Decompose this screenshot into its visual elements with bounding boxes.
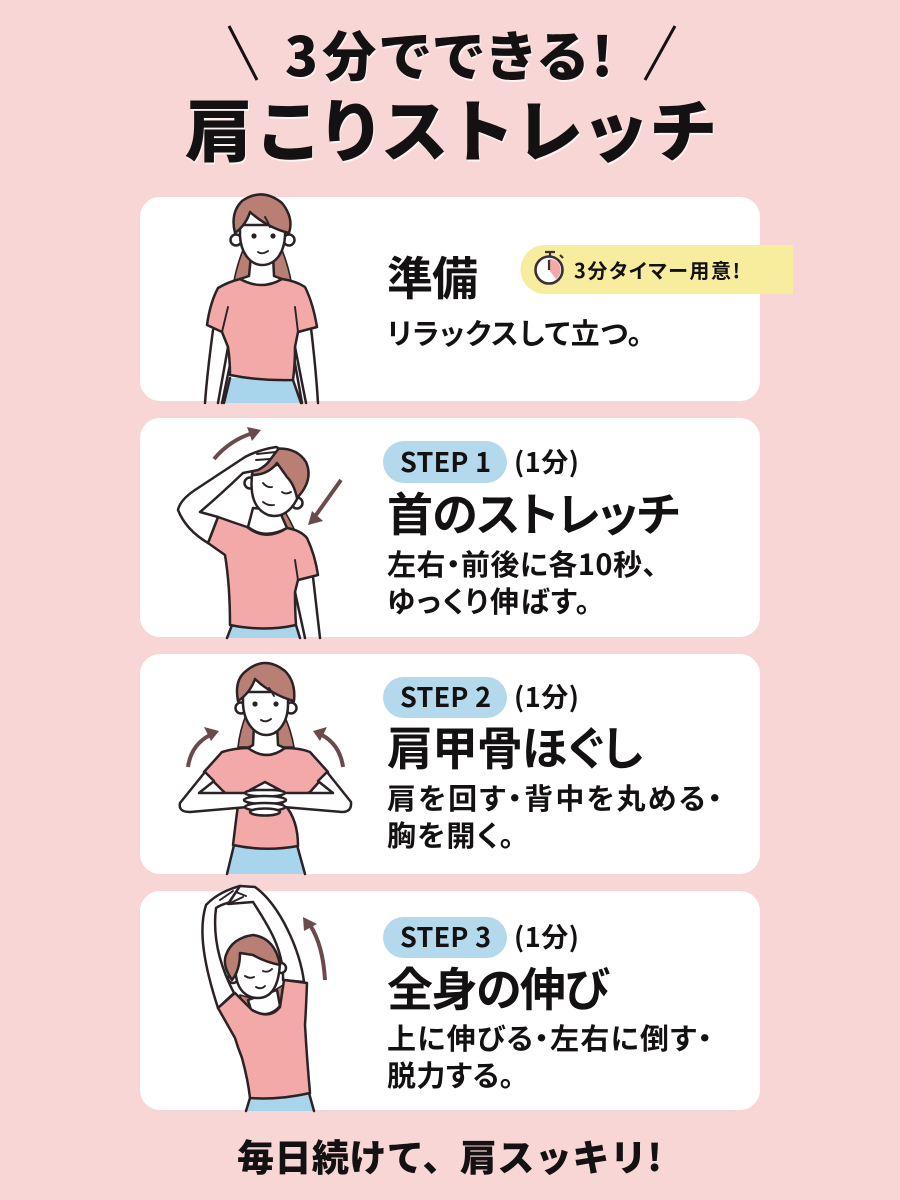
callout: timer: 3分タイマー用意! [574, 255, 740, 284]
description [387, 542, 657, 621]
panel: STEP 2 [140, 654, 760, 874]
STEP 2 badge: STEP 2 [400, 676, 491, 715]
arrow: left [188, 727, 219, 767]
STEP 3 badge: (1分) [514, 916, 579, 955]
description: 左右・前後に各10秒、 [387, 542, 657, 584]
STEP 2 badge: (1分) [514, 676, 579, 715]
figure: shoulder blades [180, 663, 351, 874]
heading: 首のストレッチ [387, 479, 680, 545]
panel: STEP 3 [140, 886, 760, 1111]
description: 脱力する。 [387, 1053, 514, 1095]
footer message: 毎日続けて、肩スッキリ! [237, 1128, 662, 1182]
callout: timer [520, 245, 793, 294]
description: 胸を開く。 [387, 813, 514, 855]
panel: STEP 1 [140, 418, 760, 638]
figure: standing woman [205, 194, 318, 403]
description: リラックスして立つ。 [387, 311, 642, 353]
description [387, 776, 722, 855]
arrow: lower [308, 480, 341, 525]
STEP 2 badge [383, 676, 579, 718]
main heading: 肩こりストレッチ [185, 77, 715, 176]
STEP 1 badge [383, 441, 579, 483]
heading: 全身の伸び [387, 954, 611, 1020]
STEP 3 badge: STEP 3 [400, 916, 491, 955]
arrow: upper [214, 427, 261, 459]
description: ゆっくり伸ばす。 [387, 579, 590, 621]
figure: full body stretch [202, 886, 314, 1111]
panel: 準備 [140, 194, 793, 403]
description [387, 1016, 712, 1095]
STEP 3 badge [383, 916, 579, 958]
STEP 1 badge: (1分) [514, 441, 579, 480]
icon: stopwatch [536, 252, 563, 284]
figure: neck stretch [178, 447, 320, 638]
title: 3分でできる! with slashes: 3分でできる! [285, 13, 613, 92]
description: 上に伸びる・左右に倒す・ [387, 1016, 712, 1058]
heading: 肩甲骨ほぐし [387, 713, 643, 779]
STEP 1 badge: STEP 1 [400, 441, 491, 480]
arrow: up [303, 917, 325, 980]
arrow: right [313, 727, 343, 767]
準備 heading: 準備 [387, 243, 478, 309]
description: 肩を回す・背中を丸める・ [387, 776, 722, 818]
